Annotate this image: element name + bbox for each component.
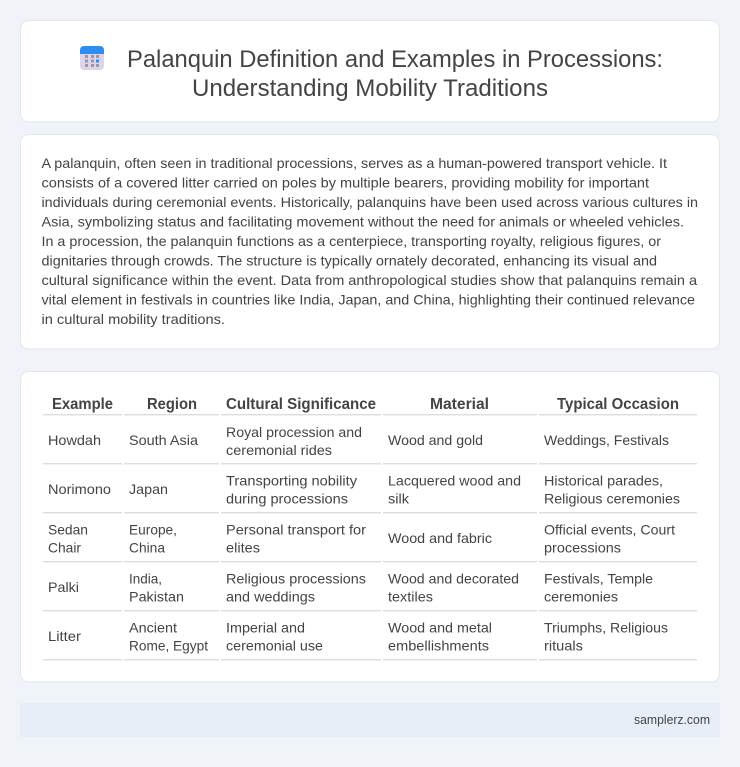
text block: description paragraph: cultural significance within the event. Data from anthropological studies show that palanquins remain a xyxy=(42,272,697,288)
text block: description paragraph xyxy=(42,155,698,327)
table row: Litter: Triumphs, Religious xyxy=(544,620,668,636)
table row: Norimono: Japan xyxy=(129,481,168,497)
table row: Sedan Chair: Official events, Court xyxy=(544,522,675,538)
title: Understanding Mobility Traditions xyxy=(192,75,548,102)
table row: Palki: Pakistan xyxy=(129,588,184,604)
panel: examples table xyxy=(20,372,720,682)
text block: description paragraph: In a procession, the palanquin functions as a centerpiece, transporting royalty, religious figures, or xyxy=(42,233,661,249)
text block: description paragraph: consists of a covered litter carried on poles by multiple bearers, providing mobility for important xyxy=(42,174,649,190)
table header: Example xyxy=(52,396,113,413)
table row: Howdah: ceremonial rides xyxy=(226,442,332,458)
table row: Howdah: Howdah xyxy=(48,432,101,448)
table row: Palki xyxy=(43,570,697,611)
table row: Litter: Wood and metal xyxy=(388,620,492,636)
icon: calendar xyxy=(80,46,104,70)
table row: Litter: rituals xyxy=(544,638,583,654)
table row: Norimono: Historical parades, xyxy=(544,472,663,488)
table row: Sedan Chair: processions xyxy=(544,540,621,556)
table row: Norimono: during processions xyxy=(226,490,348,506)
table row: Palki: Palki xyxy=(48,579,79,595)
table row: Norimono: Religious ceremonies xyxy=(544,490,680,506)
table row: Sedan Chair: Chair xyxy=(48,540,81,556)
table header: Typical Occasion xyxy=(557,396,679,413)
table row: Howdah: Royal procession and xyxy=(226,424,362,440)
table row: Palki: ceremonies xyxy=(544,588,618,604)
table header: Cultural Significance xyxy=(226,396,376,413)
table row: Palki: Wood and decorated xyxy=(388,570,519,586)
panel: title card xyxy=(20,20,720,122)
table row: Sedan Chair: Sedan xyxy=(48,522,88,538)
table row: Howdah: Weddings, Festivals xyxy=(544,432,669,448)
panel: description xyxy=(20,134,720,349)
table row: Litter xyxy=(43,620,697,660)
table row: Litter: embellishments xyxy=(388,638,489,654)
table header xyxy=(43,396,697,415)
title xyxy=(127,46,663,102)
table row: Palki: textiles xyxy=(388,588,433,604)
footer text: samplerz.com xyxy=(634,713,710,727)
table row: Sedan Chair: Europe, xyxy=(129,522,177,538)
table row: Howdah: Wood and gold xyxy=(388,432,483,448)
table row: Sedan Chair: Wood and fabric xyxy=(388,530,492,546)
table row: Sedan Chair: Personal transport for xyxy=(226,522,366,538)
table row: Litter: ceremonial use xyxy=(226,638,323,654)
table row: Litter: Imperial and xyxy=(226,620,305,636)
text block: description paragraph: Asia, symbolizing status and facilitating movement without the need for animals or wheeled vehicles. xyxy=(42,214,684,230)
table row: Norimono: silk xyxy=(388,490,410,506)
table row: Sedan Chair xyxy=(43,522,697,562)
table row: Norimono: Lacquered wood and xyxy=(388,472,521,488)
footer bar xyxy=(20,703,720,737)
table row: Norimono: Transporting nobility xyxy=(226,472,357,488)
title: Palanquin Definition and Examples in Processions: xyxy=(127,46,663,73)
text block: description paragraph: individuals during ceremonial events. Historically, palanquins have been used across various cultures in xyxy=(42,194,698,210)
table row: Palki: Festivals, Temple xyxy=(544,570,653,586)
text block: description paragraph: A palanquin, often seen in traditional processions, serves as a human-powered transport vehicle. It xyxy=(42,155,667,171)
text block: description paragraph: in cultural mobility traditions. xyxy=(42,311,225,327)
table row: Howdah: South Asia xyxy=(129,432,198,448)
table row: Palki: Religious processions xyxy=(226,570,366,586)
text block: description paragraph: dignitaries through crowds. The structure is typically ornately decorated, enhancing its visual and xyxy=(42,252,657,268)
text block: description paragraph: vital element in festivals in countries like India, Japan, and China, highlighting their continued relevance xyxy=(42,292,695,308)
table row: Norimono: Norimono xyxy=(48,481,111,497)
table row: Palki: India, xyxy=(129,570,162,586)
table row: Litter: Litter xyxy=(48,628,81,644)
table row: Norimono xyxy=(43,472,697,513)
table row: Sedan Chair: China xyxy=(129,540,165,556)
table row: Litter: Ancient xyxy=(129,620,177,636)
table row: Palki: and weddings xyxy=(226,588,315,604)
table row: Howdah xyxy=(43,424,697,464)
table row: Litter: Rome, Egypt xyxy=(129,638,208,654)
table header: Region xyxy=(147,396,197,413)
table header: Material xyxy=(430,396,489,413)
table row: Sedan Chair: elites xyxy=(226,540,260,556)
